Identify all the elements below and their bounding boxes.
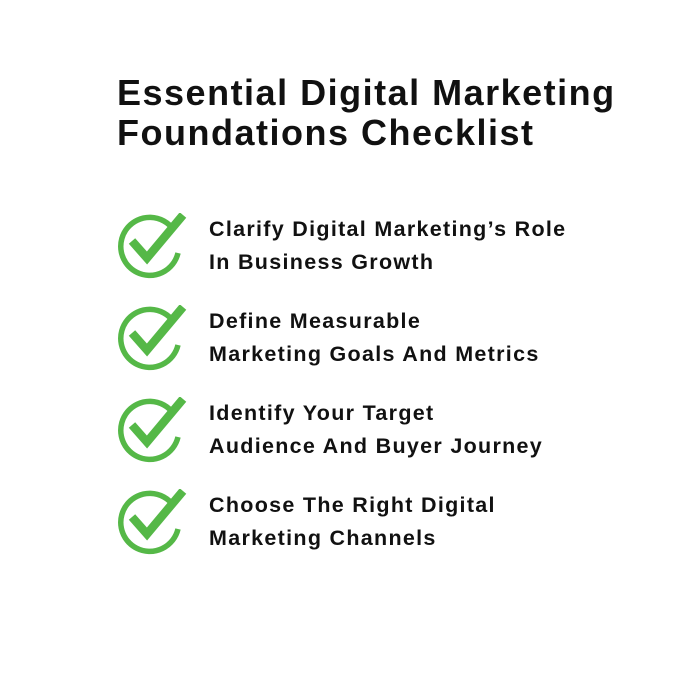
item 2 (118, 305, 540, 370)
text 1: Clarify Digital Marketing’s Role (209, 217, 566, 241)
icon: check 1 (118, 213, 186, 278)
title: Essential Digital Marketing (117, 72, 616, 113)
icon: check 3 (118, 397, 186, 462)
text 4: Choose The Right Digital (209, 493, 496, 517)
text 1: In Business Growth (209, 250, 434, 274)
text 4 (209, 493, 496, 550)
item 4 (118, 489, 496, 554)
text 3: Identify Your Target (209, 401, 434, 425)
text 1 (209, 217, 566, 274)
item 1 (118, 213, 566, 278)
title: Foundations Checklist (117, 112, 535, 153)
text 3: Audience And Buyer Journey (209, 434, 543, 458)
text 3 (209, 401, 543, 458)
icon: check 2 (118, 305, 186, 370)
icon: check 4 (118, 489, 186, 554)
title (117, 72, 616, 153)
item 3 (118, 397, 543, 462)
text 2 (209, 309, 540, 366)
text 2: Marketing Goals And Metrics (209, 342, 540, 366)
text 2: Define Measurable (209, 309, 421, 333)
text 4: Marketing Channels (209, 526, 437, 550)
